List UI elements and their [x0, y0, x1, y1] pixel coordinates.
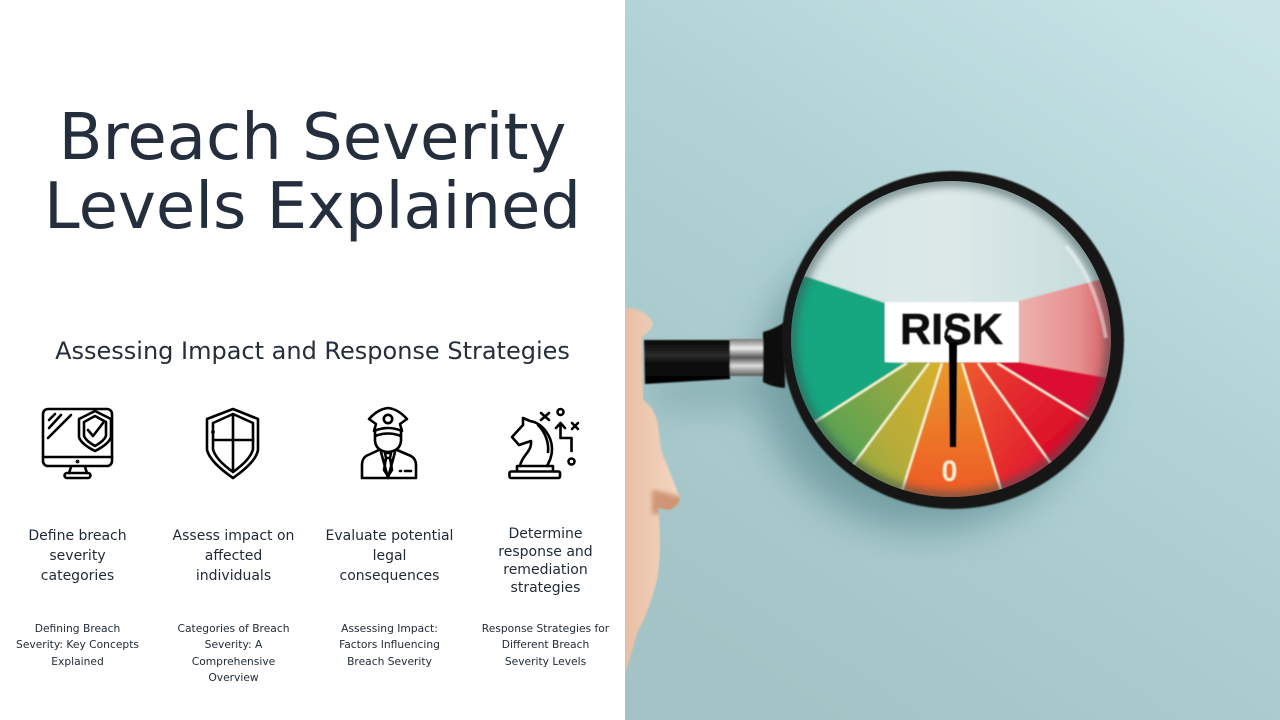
caption: assessing [339, 622, 440, 668]
title: Breach Severity [59, 101, 566, 175]
photo: magnifying glass over risk gauge [625, 0, 1280, 720]
label: determine: strategies [511, 580, 580, 596]
caption: categories: Categories of Breach [178, 622, 289, 634]
lens highlight [1066, 246, 1106, 338]
caption: response: Response Strategies for [482, 622, 609, 634]
icon row [42, 406, 580, 480]
title: Levels Explained [44, 170, 581, 244]
subtitle: Assessing Impact and Response Strategies [55, 337, 570, 365]
caption: response: Severity Levels [505, 655, 586, 668]
label: define: severity [49, 548, 106, 564]
caption: categories: Severity: A [205, 638, 262, 651]
caption: defining: Explained [51, 655, 104, 668]
label: determine [498, 526, 593, 596]
label: evaluate: Evaluate potential [326, 528, 453, 544]
hand [625, 308, 684, 675]
gauge ray lines [815, 363, 1090, 493]
gauge zero: 0 [942, 455, 958, 488]
lens inner shading [791, 181, 1111, 497]
label: assess: individuals [196, 568, 271, 584]
caption: defining: Defining Breach [35, 622, 120, 634]
caption: assessing: Breach Severity [347, 655, 432, 668]
handle [644, 322, 785, 388]
caption: categories [178, 622, 289, 684]
gauge segments [814, 362, 930, 465]
label: determine: remediation [503, 562, 588, 578]
caption: categories: Overview [208, 671, 259, 684]
lens with gauge [791, 181, 1111, 497]
gauge needle [946, 326, 964, 447]
panel: text and icons [0, 0, 625, 720]
label: assess: Assess impact on [173, 528, 294, 544]
caption: response [482, 622, 610, 668]
label: assess [172, 528, 294, 584]
lens rim [782, 171, 1124, 509]
icon: chess knight strategy [510, 409, 578, 478]
icon: police officer [362, 408, 416, 478]
title [44, 101, 581, 244]
caption: categories: Comprehensive [192, 655, 275, 668]
label: evaluate: consequences [340, 568, 439, 584]
caption: response: Different Breach [502, 638, 589, 651]
label: evaluate: legal [373, 548, 406, 564]
green panel [791, 276, 905, 422]
pink panel [1018, 279, 1111, 378]
RISK label [885, 302, 1018, 362]
caption: defining: Severity: Key Concepts [16, 638, 139, 651]
icon: shield with cross [207, 409, 258, 478]
label: determine: response and [498, 544, 593, 560]
label: determine: Determine [508, 526, 583, 542]
label: evaluate [326, 528, 453, 584]
caption: assessing: Assessing Impact: [341, 622, 438, 634]
label: define [28, 528, 127, 584]
caption: assessing: Factors Influencing [339, 638, 440, 651]
RISK label: RISK [900, 305, 1003, 354]
label: define: Define breach [28, 528, 127, 544]
background [625, 0, 1280, 720]
label: assess: affected [205, 548, 262, 564]
shadow [650, 226, 1090, 530]
caption: defining [16, 622, 139, 668]
label: define: categories [41, 568, 114, 584]
icon: monitor with shield [43, 409, 112, 478]
